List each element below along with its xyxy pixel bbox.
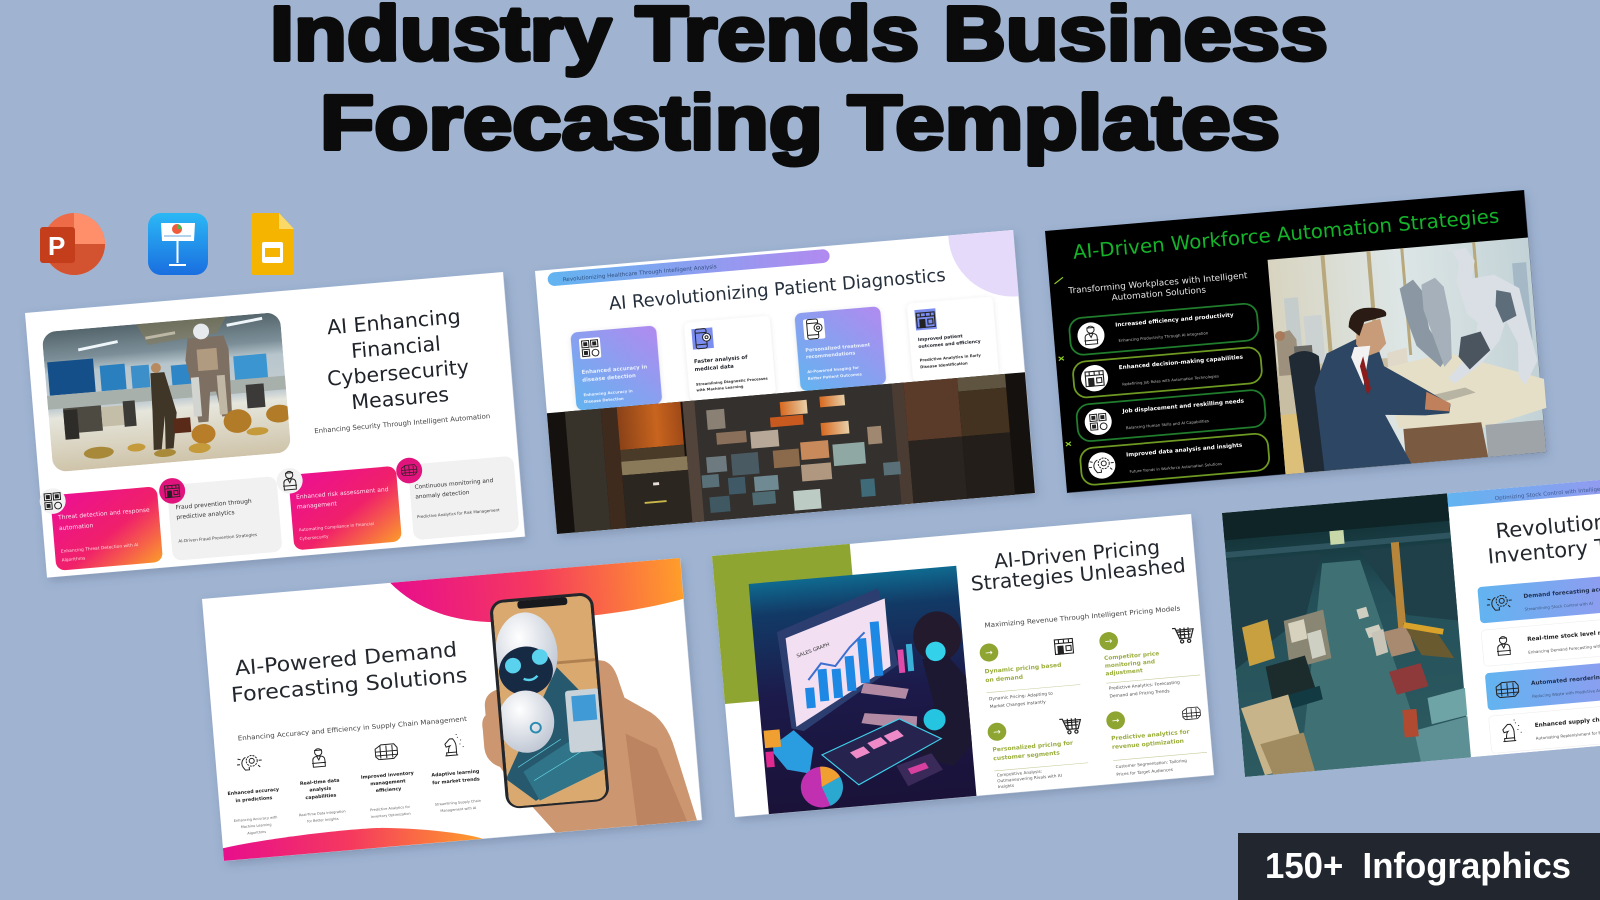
slide title — [322, 304, 472, 416]
green block — [712, 544, 863, 704]
card: personalized treatment — [794, 306, 886, 391]
item: predictive analytics: Predictive analytics for — [1111, 729, 1190, 742]
item: personalized pricing: Competitive Analysis: — [997, 769, 1042, 778]
list item: data analysis: Future Trends in Workforce Automation Solutions — [1129, 462, 1222, 474]
photo: robot analysing sales graph — [749, 566, 976, 814]
decorative sparks — [1052, 277, 1077, 446]
slide title: Forecasting Solutions — [230, 663, 468, 707]
card: improved outcomes: Improved patient — [918, 333, 964, 343]
item: predictive analytics: → — [1112, 716, 1120, 727]
list item: job displacement: Balancing Human Skills and AI Capabilities — [1126, 418, 1209, 430]
panel: slide AI-Powered Demand Forecasting — [202, 558, 702, 861]
card: improved outcomes: outcomes and efficiency — [918, 339, 981, 350]
card: threat detection: Threat detection and response — [57, 507, 150, 521]
slide title: Strategies Unleashed — [970, 553, 1187, 596]
list item: job displacement: Job displacement and reskilling needs — [1121, 399, 1245, 415]
card: improved outcomes — [907, 297, 999, 382]
card: faster analysis: Streamlining Diagnostic Processes — [696, 377, 768, 387]
column: real-time data: for Better Insights — [307, 817, 339, 823]
slide title: AI-Driven Pricing — [993, 535, 1161, 573]
title — [270, 0, 1328, 166]
item: competitor price: → — [1105, 637, 1113, 647]
item: competitor price — [1099, 624, 1202, 700]
column: adaptive learning: Streamlining Supply Chain — [435, 799, 481, 807]
column: real-time data: Real-Time Data Integration — [299, 809, 346, 817]
item: personalized pricing: → — [993, 727, 1001, 738]
item: personalized pricing: Personalized pricing for — [992, 741, 1073, 754]
badge: 150+ Infographics — [1238, 833, 1600, 900]
column: real-time data — [294, 747, 346, 824]
item: predictive analytics — [1106, 704, 1208, 777]
photo: robot analysing sales graph: SALES GRAPH — [796, 642, 831, 659]
slide title: AI Enhancing — [326, 304, 461, 339]
column: improved inventory: Inventory Optimization — [371, 812, 411, 819]
item: predictive analytics: revenue optimization — [1112, 739, 1184, 751]
card: threat detection: automation — [59, 522, 94, 532]
decorative purple circle — [948, 230, 1019, 302]
list item: job displacement — [1076, 389, 1266, 442]
card: faster analysis — [684, 316, 776, 401]
subtitle: Automation Solutions — [1111, 286, 1207, 303]
photo: warehouse — [1222, 493, 1471, 777]
card: improved outcomes: Disease Identification — [920, 360, 968, 369]
card: accuracy: Enhanced accuracy in — [581, 364, 648, 376]
item: competitor price: Competitor price — [1104, 651, 1160, 662]
icon: Keynote — [148, 213, 208, 275]
icon: PowerPoint: P — [48, 231, 65, 261]
hand holding phone — [472, 585, 697, 838]
card: fraud prevention: predictive analytics — [176, 509, 235, 521]
item: competitor price: adjustment — [1105, 668, 1143, 677]
column: improved inventory: Predictive Analytics for — [370, 805, 411, 812]
item: personalized pricing: Insights — [998, 783, 1014, 789]
card: risk assessment: Enhanced risk assessment and — [296, 486, 389, 501]
column: improved inventory — [358, 742, 417, 820]
column: enhanced accuracy — [225, 753, 283, 837]
card: risk assessment: management — [297, 500, 338, 511]
list item: efficiency: Enhancing Productivity Through AI Integration — [1118, 330, 1209, 343]
card: faster analysis: medical data — [694, 364, 734, 373]
column: enhanced accuracy: Machine Learning — [241, 823, 272, 829]
card: fraud prevention: AI-Driven Fraud Prevention Strategies — [178, 532, 257, 544]
list item: data analysis: Improved data analysis and insights — [1126, 443, 1243, 459]
banner — [1447, 480, 1600, 507]
subtitle: Enhancing Accuracy and Efficiency in Supply Chain Management — [237, 715, 468, 742]
panel: slide Revolutionizing Inventory — [1222, 471, 1600, 777]
item: dynamic pricing: Dynamic Pricing: Adapting to — [989, 691, 1053, 702]
card: personalized treatment: Personalized treatment — [805, 342, 871, 354]
card: continuous monitoring — [395, 449, 520, 541]
column: adaptive learning — [428, 733, 483, 814]
column: real-time data: analysis — [309, 786, 332, 793]
card: risk assessment: Automating Compliance in Financial — [299, 521, 374, 532]
photo: robot office — [42, 312, 295, 472]
row: real-time stock — [1481, 620, 1600, 666]
panel: slide AI Revolutionizing Patient Diagnostics — [535, 230, 1035, 534]
card: personalized treatment: AI-Powered Imaging for — [807, 365, 859, 374]
item: dynamic pricing: on demand — [985, 675, 1023, 684]
badge: 150+ Infographics: 150+ Infographics — [1265, 845, 1571, 886]
banner pill — [547, 249, 830, 287]
column: real-time data: capabilities — [305, 793, 337, 801]
item: predictive analytics: Prices for Target Audiences — [1116, 767, 1173, 777]
column: enhanced accuracy: in predictions — [235, 795, 273, 804]
item: competitor price: monitoring and — [1105, 659, 1155, 670]
title: Forecasting Templates — [320, 80, 1280, 166]
column: adaptive learning: Adaptive learning — [431, 769, 480, 779]
top gradient wave — [390, 558, 684, 633]
slide title: Financial — [350, 332, 442, 363]
card: risk assessment — [276, 459, 402, 551]
item: personalized pricing: Outmaneuvering Rivals with AI — [997, 773, 1062, 783]
item: dynamic pricing: Dynamic pricing based — [984, 663, 1062, 675]
card: faster analysis: with Machine Learning — [696, 385, 744, 393]
item: dynamic pricing: Market Changes Instantly — [990, 699, 1046, 710]
subtitle — [1067, 271, 1249, 307]
column: adaptive learning: Management with AI — [440, 806, 476, 813]
slide title — [1489, 516, 1600, 564]
card: personalized treatment: recommendations — [806, 350, 856, 361]
card: accuracy: Disease Detection — [584, 396, 624, 404]
row: supply chain — [1488, 706, 1600, 754]
item: dynamic pricing: → — [985, 648, 993, 659]
row: demand forecasting: Streamlining Stock Control with AI — [1524, 601, 1593, 612]
card: personalized treatment: Better Patient Outcomes — [808, 371, 863, 381]
slide title: AI-Powered Demand — [234, 638, 458, 680]
slide title — [968, 533, 1187, 596]
panel: slide AI Enhancing Financial Cybersecurity — [24, 272, 525, 578]
slide title: AI Revolutionizing Patient Diagnostics — [608, 265, 946, 315]
card: accuracy — [570, 325, 662, 411]
slide title: AI-Driven Workforce Automation Strategies — [1072, 205, 1500, 264]
icon: Google Slides — [251, 213, 294, 275]
icon: PowerPoint — [40, 213, 105, 275]
column: real-time data: Real-time data — [300, 778, 340, 787]
panel: slide AI-Driven Workforce Automation — [1045, 190, 1550, 493]
card: threat detection — [39, 479, 163, 572]
column: improved inventory: efficiency — [376, 786, 402, 794]
card: risk assessment: Cybersecurity — [299, 534, 329, 541]
column: adaptive learning: for market trends — [432, 776, 480, 786]
photo: abstract data cubes — [547, 372, 1035, 534]
item: competitor price: Demand and Pricing Trends — [1109, 688, 1171, 699]
item: personalized pricing: customer segments — [993, 751, 1061, 762]
card: faster analysis: Faster analysis of — [694, 355, 748, 365]
row: demand forecasting — [1478, 576, 1600, 624]
subtitle: Maximizing Revenue Through Intelligent Pricing Models — [984, 604, 1181, 630]
bottom gradient wave — [222, 819, 483, 861]
card: fraud prevention: Fraud prevention through — [175, 498, 252, 511]
card: accuracy: disease detection — [582, 373, 636, 384]
card: continuous monitoring: anomaly detection — [415, 490, 470, 501]
banner pill: Revolutionizing Healthcare Through Intelligent Analysis — [563, 264, 717, 283]
card: improved outcomes: Predictive Analytics in Early — [919, 352, 982, 363]
slide title: Measures — [350, 382, 450, 414]
list item: data analysis — [1079, 433, 1270, 486]
column: enhanced accuracy: Enhancing Accuracy with — [234, 815, 278, 823]
column: improved inventory: Improved inventory — [361, 770, 414, 781]
slide title: Cybersecurity — [326, 355, 470, 391]
column: improved inventory: management — [370, 778, 407, 787]
list item: decision making — [1072, 346, 1263, 398]
row: automated reordering — [1485, 663, 1600, 710]
item: personalized pricing — [987, 715, 1090, 790]
slide title — [228, 637, 468, 707]
column: enhanced accuracy: Algorithms — [247, 830, 267, 835]
item: dynamic pricing — [979, 636, 1082, 710]
card: threat detection: Algorithms — [61, 555, 86, 564]
item: competitor price: Predictive Analytics: Forecasting — [1109, 680, 1180, 692]
subtitle: Transforming Workplaces with Intelligent — [1067, 271, 1248, 296]
list item: decision making: Enhanced decision-making capabilities — [1119, 355, 1244, 371]
item: predictive analytics: Customer Segmentation: Tailoring — [1115, 758, 1187, 769]
card: threat detection: Enhancing Threat Detection with AI — [61, 542, 139, 555]
card: continuous monitoring: Continuous monitoring and — [414, 478, 494, 491]
card: accuracy: Enhancing Accuracy in — [583, 388, 633, 397]
list item: decision making: Redefining Job Roles with Automation Technologies — [1122, 374, 1219, 387]
card: fraud prevention — [158, 469, 283, 562]
subtitle: Enhancing Security Through Intelligent Automation — [314, 412, 491, 435]
card: continuous monitoring: Predictive Analytics for Risk Management — [417, 507, 500, 519]
column: enhanced accuracy: Enhanced accuracy — [227, 787, 279, 797]
list item: efficiency — [1068, 303, 1259, 356]
list item: efficiency: Increased efficiency and productivity — [1115, 312, 1234, 329]
photo: businessman and robots — [1268, 237, 1550, 474]
panel: slide AI-Driven Pricing Strategies — [712, 514, 1214, 817]
